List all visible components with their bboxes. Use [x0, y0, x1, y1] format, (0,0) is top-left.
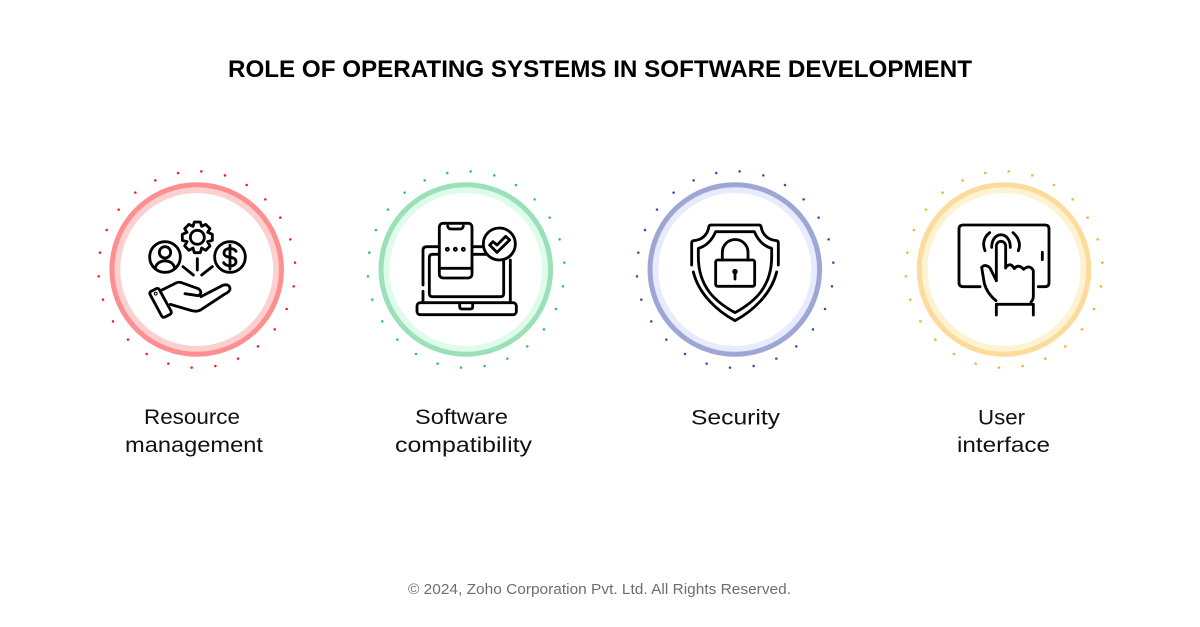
label: management — [125, 434, 263, 457]
panel: resource management — [97, 170, 296, 457]
ring: yellow — [919, 185, 1089, 354]
label: Software — [415, 406, 508, 429]
label — [395, 406, 533, 457]
ring: red — [112, 185, 282, 354]
dotted ring: green — [367, 170, 566, 369]
label: User — [978, 406, 1025, 430]
panel: security — [636, 170, 835, 430]
icon: hand with person, gear and dollar — [150, 222, 245, 317]
icon: hand tapping tablet — [959, 225, 1049, 315]
panel: software compatibility — [367, 170, 566, 457]
dotted ring: orange — [905, 170, 1104, 369]
dotted ring: red — [97, 170, 296, 369]
ring: blue — [650, 185, 820, 354]
label: compatibility — [395, 434, 533, 457]
label: interface — [957, 434, 1050, 457]
label — [957, 406, 1050, 457]
label — [125, 406, 263, 457]
dotted ring: blue — [636, 170, 835, 369]
ring: green — [381, 185, 551, 354]
label: Security — [691, 406, 781, 430]
icon: shield with padlock — [692, 225, 778, 321]
icon: laptop with phone and check badge — [417, 223, 516, 315]
title: ROLE OF OPERATING SYSTEMS IN SOFTWARE DEVELOPMENT — [228, 56, 972, 83]
footer copyright: © 2024, Zoho Corporation Pvt. Ltd. All Rights Reserved. — [408, 581, 791, 598]
label: Resource — [144, 406, 240, 429]
panel: user interface — [905, 170, 1104, 457]
